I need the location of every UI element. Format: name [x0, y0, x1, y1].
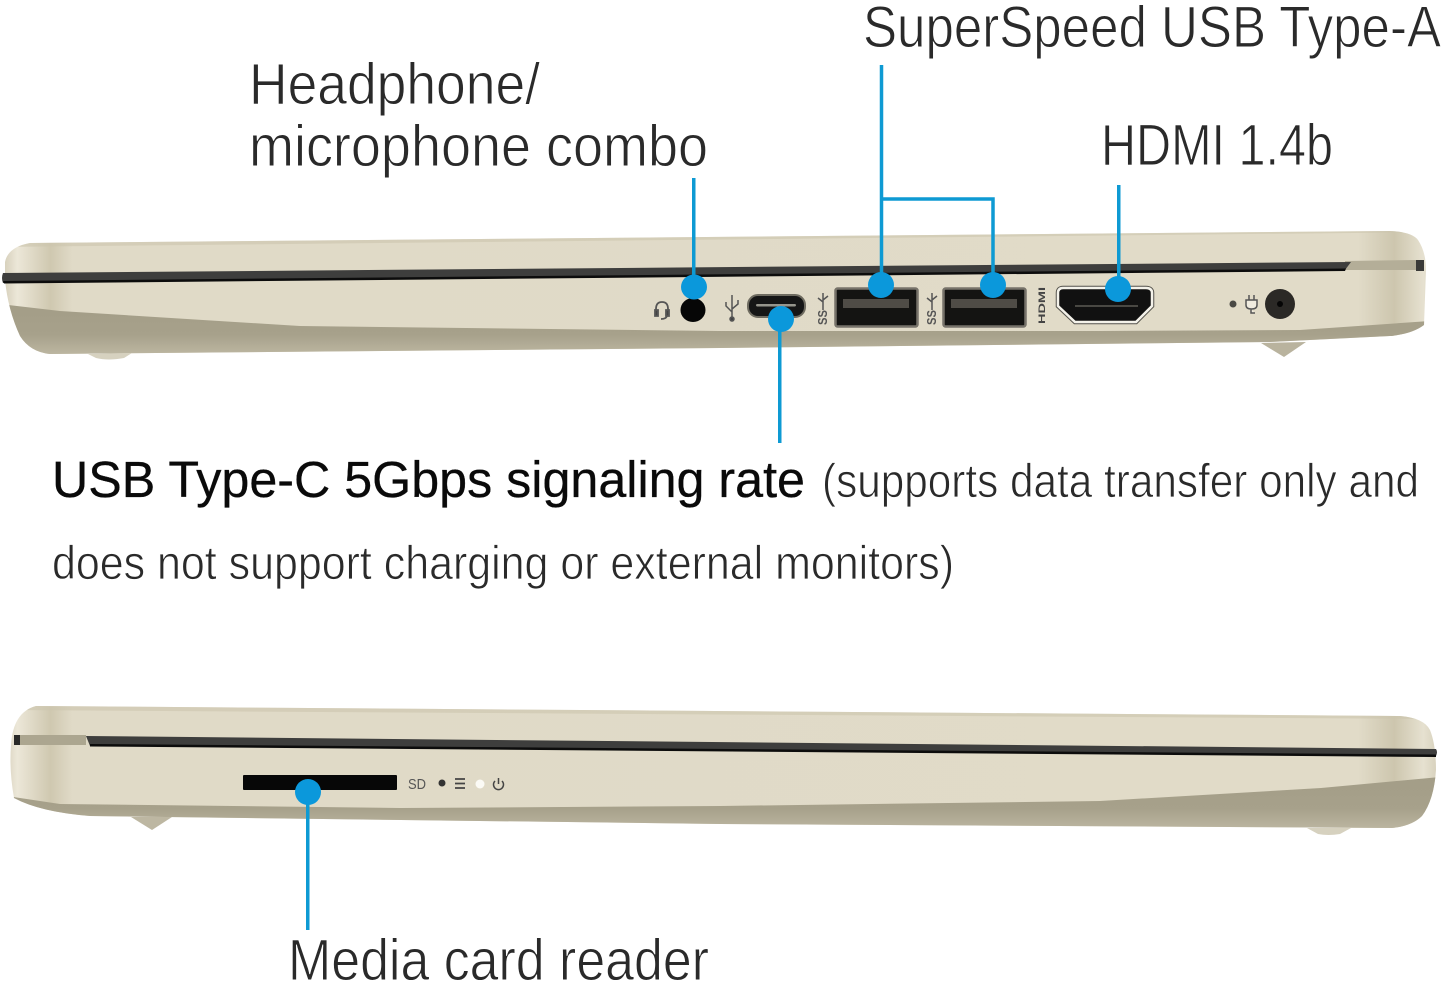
- text block: USB Type-C description: does not support charging or external monitors): [52, 536, 954, 589]
- text block: USB Type-C description: USB Type-C 5Gbps signaling rate: [52, 451, 805, 508]
- right foot: [1307, 828, 1351, 835]
- white led: [476, 780, 484, 788]
- underside wedge: [14, 778, 1436, 828]
- icon: power plug: [1246, 295, 1257, 313]
- heading: Headphone/microphone combo: microphone combo: [249, 114, 708, 179]
- headphone jack: [680, 298, 706, 322]
- laptop body fill: [10, 706, 1436, 828]
- usb-a port 1: [836, 288, 918, 326]
- lid gap line: [86, 736, 1437, 756]
- laptop: right side view: [0, 700, 1445, 835]
- connector: hdmi: [1105, 185, 1131, 302]
- underside wedge: [9, 305, 1424, 354]
- icon: headphone: [655, 302, 669, 319]
- connector: media card reader: [295, 779, 321, 930]
- icon: superspeed usb 1: [815, 293, 830, 325]
- icon: usb: [726, 295, 738, 321]
- icon: power: [493, 778, 503, 790]
- hinge segment: [14, 735, 86, 745]
- top lid highlight: [27, 706, 1416, 719]
- power jack: [1265, 289, 1295, 319]
- icon: superspeed usb 2: SS: [924, 310, 939, 325]
- connector: superspeed bracket: [868, 65, 1006, 298]
- left foot: [88, 353, 132, 360]
- hdmi label: HDMI: [1037, 287, 1047, 324]
- usb-c port: [748, 295, 805, 317]
- status led: [438, 780, 446, 786]
- sd card slot: [243, 775, 397, 790]
- usb-a port 2: [944, 288, 1026, 326]
- text block: USB Type-C description: [52, 451, 1419, 589]
- left foot: [131, 817, 172, 830]
- connector: headphone: [681, 178, 707, 300]
- heading: Headphone/microphone combo: [249, 52, 708, 179]
- laptop body fill: [5, 231, 1426, 354]
- hdmi port: [1058, 288, 1152, 322]
- top lid highlight: [18, 231, 1402, 247]
- connector: usb-c: [768, 306, 794, 443]
- laptop: left side view: [0, 225, 1445, 360]
- sd label: SD: [408, 776, 426, 793]
- callout connectors: top view: [681, 65, 1131, 443]
- icon: storage: [455, 779, 465, 788]
- icon: superspeed usb 2: [924, 293, 939, 325]
- right foot: [1261, 342, 1306, 357]
- lid gap line: [2, 262, 1351, 283]
- icon: superspeed usb 1: SS: [815, 310, 830, 325]
- heading: HDMI 1.4b: HDMI 1.4b: [1101, 113, 1333, 178]
- hinge segment: [1345, 260, 1422, 270]
- heading: Headphone/microphone combo: Headphone/: [249, 52, 541, 117]
- power led: [1230, 300, 1236, 308]
